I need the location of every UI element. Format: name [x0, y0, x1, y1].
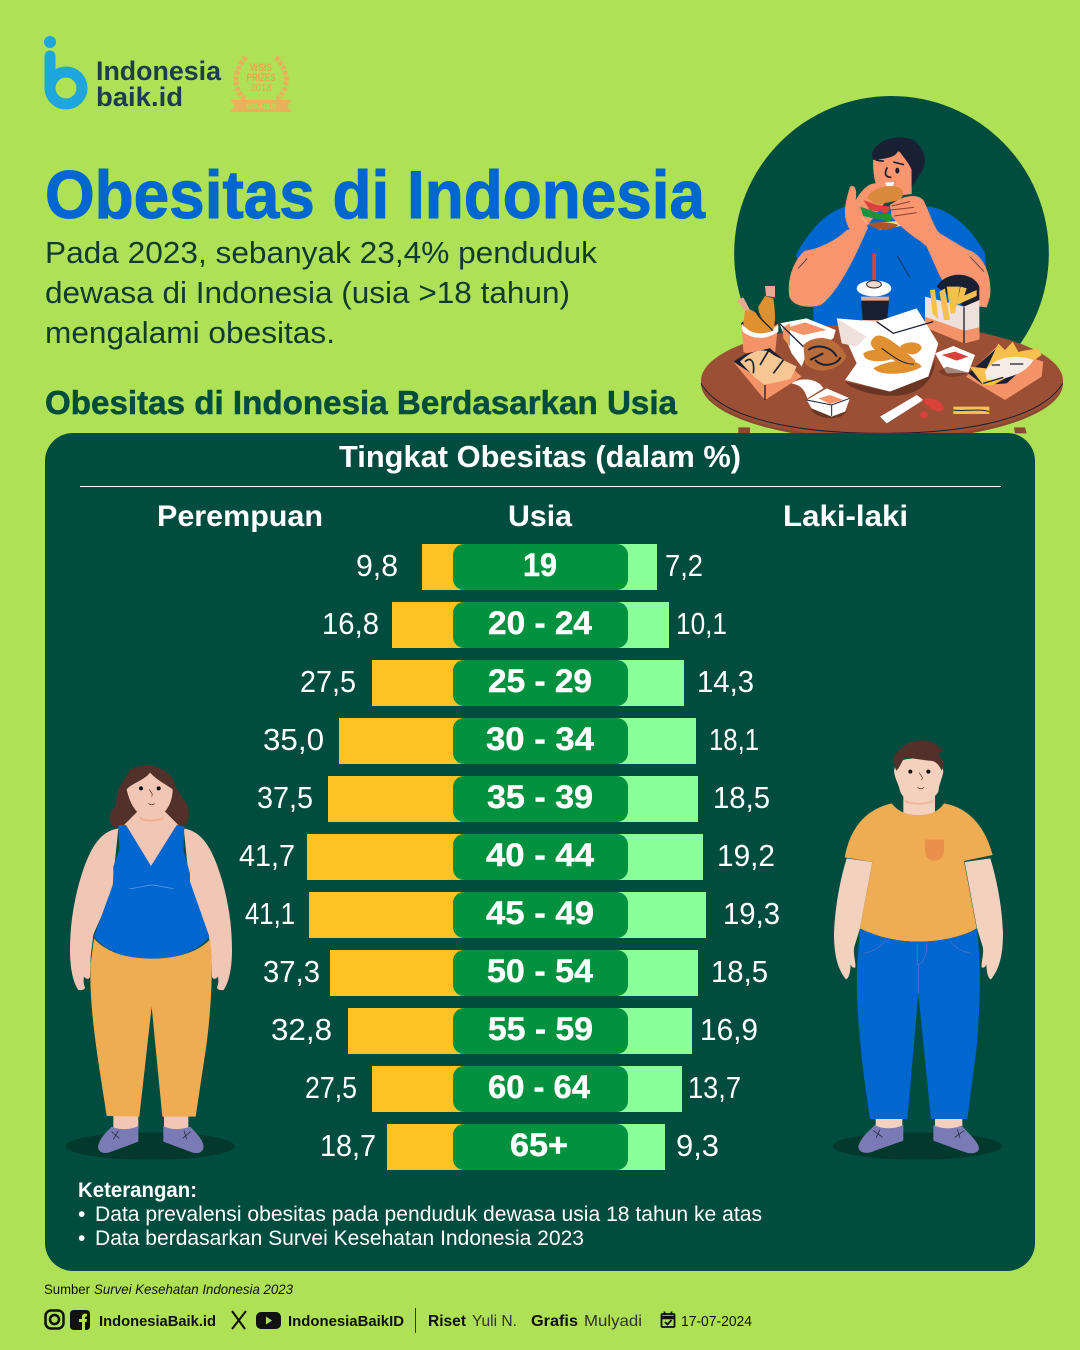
- credit: graphics: [531, 1313, 642, 1330]
- credit: graphics: Mulyadi: [584, 1313, 642, 1330]
- row 20-24: 10,1: [676, 606, 727, 641]
- row 35-39: 18,5: [713, 780, 770, 815]
- row 65+: 18,7: [320, 1128, 376, 1163]
- intro text: Pada 2023, sebanyak 23,4% penduduk: [45, 235, 598, 270]
- row 55-59: 32,8: [271, 1012, 332, 1047]
- row 30-34: [263, 718, 759, 764]
- row 25-29: 27,5: [300, 664, 356, 699]
- notes: Data berdasarkan Survei Kesehatan Indonesia 2023: [95, 1227, 584, 1250]
- row 30-34: 18,1: [709, 722, 759, 757]
- row 25-29: [300, 660, 754, 706]
- column headers: Perempuan: [157, 500, 323, 533]
- source: Survei Kesehatan Indonesia 2023: [94, 1281, 293, 1297]
- notes: Data prevalensi obesitas pada penduduk dewasa usia 18 tahun ke atas: [95, 1203, 762, 1226]
- credit: research: Yuli N.: [472, 1313, 517, 1330]
- icon: X: [232, 1311, 246, 1329]
- row 65+: [320, 1124, 719, 1170]
- logo: Indonesia Baik: baik.id: [96, 82, 183, 112]
- row 20-24: 20 - 24: [488, 605, 592, 641]
- title: Obesitas di Indonesia: [45, 157, 706, 233]
- notes: [78, 1179, 762, 1250]
- row 45-49: 45 - 49: [486, 895, 594, 931]
- icon: instagram: [46, 1310, 64, 1328]
- icon: youtube: [256, 1312, 281, 1329]
- row 55-59: 16,9: [700, 1012, 758, 1047]
- intro text: [45, 235, 598, 350]
- row 60-64: [305, 1066, 741, 1112]
- handle: social: IndonesiaBaikID: [288, 1313, 404, 1330]
- row 40-44: 19,2: [717, 838, 775, 873]
- row 50-54: 50 - 54: [487, 953, 593, 989]
- row 19: [356, 544, 703, 590]
- award badge: WSIS Prizes 2018 winner: PRIZES: [246, 72, 276, 84]
- row 30-34: 35,0: [263, 722, 324, 757]
- footer credits: [46, 1308, 752, 1333]
- illustration: man: [833, 740, 1003, 1160]
- credit: research: [428, 1313, 517, 1330]
- illustration: woman: [66, 765, 235, 1160]
- row 55-59: 55 - 59: [488, 1011, 593, 1047]
- row 40-44: 41,7: [239, 838, 295, 873]
- handle: website: IndonesiaBaik.id: [99, 1313, 216, 1330]
- column headers: Laki-laki: [783, 500, 908, 533]
- notes: Keterangan:: [78, 1179, 197, 1202]
- award badge: WSIS Prizes 2018 winner: WINNER: [246, 102, 277, 111]
- column headers: Usia: [508, 500, 572, 533]
- row 25-29: 25 - 29: [488, 663, 592, 699]
- icon: calendar: [662, 1312, 674, 1327]
- chart: butterfly bars: [239, 544, 780, 1170]
- row 65+: 65+: [510, 1127, 568, 1163]
- row 35-39: [257, 776, 770, 822]
- row 30-34: 30 - 34: [486, 721, 594, 757]
- intro text: mengalami obesitas.: [45, 315, 335, 350]
- notes: •: [78, 1203, 85, 1226]
- row 35-39: 37,5: [257, 780, 313, 815]
- notes: •: [78, 1227, 85, 1250]
- row 19: 7,2: [665, 548, 703, 583]
- source: Sumber: [44, 1281, 90, 1297]
- column headers: [157, 500, 908, 533]
- row 65+: 9,3: [676, 1128, 719, 1163]
- section heading: Obesitas di Indonesia Berdasarkan Usia: [45, 384, 678, 421]
- credit: research: Riset: [428, 1313, 467, 1330]
- row 60-64: 60 - 64: [488, 1069, 590, 1105]
- row 50-54: [263, 950, 768, 996]
- row 55-59: [271, 1008, 758, 1054]
- panel: obesity by age: [45, 433, 1035, 1271]
- row 40-44: [239, 834, 775, 880]
- row 50-54: 37,3: [263, 954, 320, 989]
- panel title: Tingkat Obesitas (dalam %): [339, 439, 741, 474]
- row 60-64: 27,5: [305, 1070, 357, 1105]
- intro text: dewasa di Indonesia (usia >18 tahun): [45, 275, 570, 310]
- row 19: 19: [523, 547, 557, 583]
- row 19: 9,8: [356, 548, 398, 583]
- date: 17-07-2024: [681, 1314, 752, 1330]
- icon: facebook: [70, 1310, 90, 1330]
- award badge: WSIS Prizes 2018 winner: 2018: [250, 83, 272, 94]
- row 50-54: 18,5: [711, 954, 768, 989]
- row 20-24: 16,8: [322, 606, 379, 641]
- award badge: WSIS Prizes 2018 winner: WSIS: [250, 62, 272, 74]
- row 35-39: 35 - 39: [487, 779, 593, 815]
- row 60-64: 13,7: [688, 1070, 741, 1105]
- row 45-49: 19,3: [723, 896, 780, 931]
- row 45-49: [245, 892, 780, 938]
- logo: Indonesia Baik: Indonesia: [96, 56, 222, 86]
- row 25-29: 14,3: [697, 664, 754, 699]
- row 20-24: [322, 602, 727, 648]
- award badge: WSIS Prizes 2018 winner: [230, 57, 292, 112]
- row 45-49: 41,1: [245, 896, 295, 931]
- row 40-44: 40 - 44: [486, 837, 594, 873]
- logo: Indonesia Baik: [44, 36, 222, 112]
- credit: graphics: Grafis: [531, 1313, 578, 1330]
- illustration: man eating at table: [701, 96, 1063, 441]
